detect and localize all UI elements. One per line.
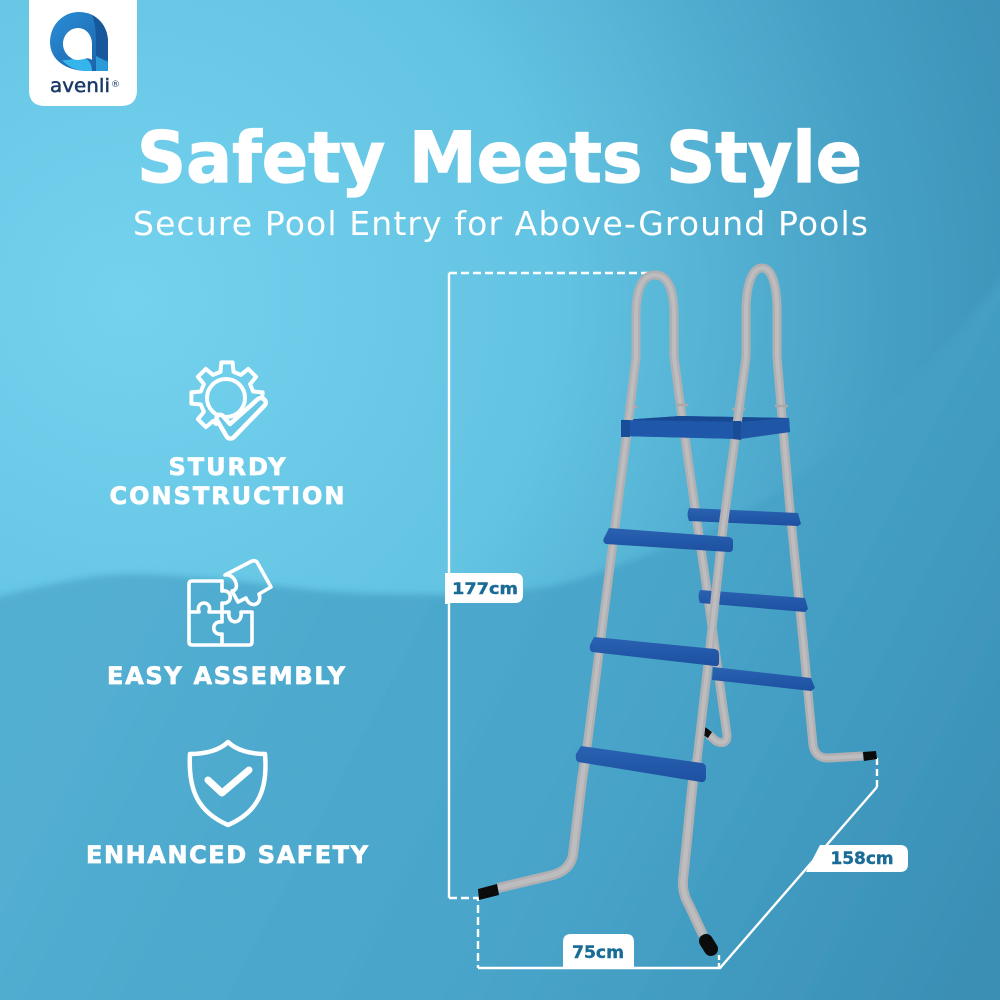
logo card bbox=[29, 0, 137, 106]
dimension lines bbox=[449, 273, 877, 968]
back step 2 bbox=[698, 590, 808, 612]
label: 75cm: 75cm bbox=[572, 943, 624, 963]
icon: shield bbox=[190, 742, 266, 825]
label: easy assembly: EASY ASSEMBLY bbox=[107, 662, 346, 690]
label: 177cm bbox=[445, 573, 523, 604]
registered mark: ® bbox=[111, 80, 120, 90]
title: Safety Meets Style bbox=[137, 117, 862, 199]
logo mark bbox=[50, 12, 108, 71]
label: 158cm: 158cm bbox=[830, 849, 894, 869]
label: sturdy: STURDY bbox=[168, 453, 286, 481]
front step 2 bbox=[590, 637, 719, 666]
label: 75cm bbox=[563, 934, 634, 969]
subtitle: Secure Pool Entry for Above-Ground Pools bbox=[133, 204, 868, 243]
logo wordmark: avenli bbox=[50, 75, 110, 97]
top platform bbox=[622, 416, 790, 439]
ladder bbox=[478, 268, 877, 949]
label: 177cm: 177cm bbox=[452, 579, 518, 598]
label: enhanced safety: ENHANCED SAFETY bbox=[86, 841, 369, 869]
small bolts bbox=[625, 405, 788, 409]
feature: sturdy construction bbox=[110, 362, 344, 510]
back step 3 bbox=[712, 667, 815, 691]
front rails bbox=[498, 268, 777, 935]
icon: gear with check bbox=[191, 362, 266, 438]
label: 158cm bbox=[806, 845, 908, 872]
back foot tip bbox=[703, 727, 712, 738]
front left foot tip bbox=[478, 884, 499, 900]
front step 1 bbox=[603, 528, 733, 552]
platform front faces bbox=[621, 418, 790, 440]
front step 3 bbox=[576, 746, 706, 782]
back rails bbox=[674, 357, 863, 758]
front right foot tip bbox=[706, 941, 711, 949]
icon: puzzle bbox=[189, 561, 271, 645]
feature: enhanced safety bbox=[86, 742, 369, 869]
feature: easy assembly bbox=[107, 561, 346, 690]
back step 1 bbox=[688, 508, 801, 526]
back right foot tip bbox=[863, 751, 877, 761]
label: construction: CONSTRUCTION bbox=[110, 482, 344, 510]
